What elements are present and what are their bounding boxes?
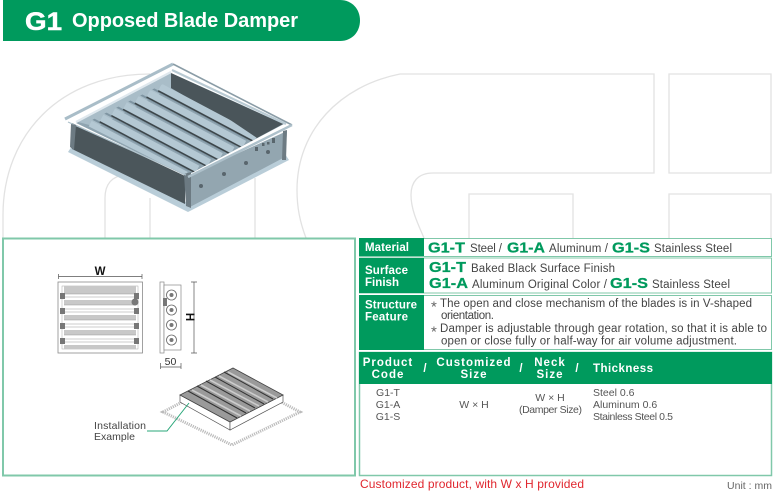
column: thickness (593, 387, 673, 423)
table header: Size (460, 369, 488, 381)
note: unit: Unit : mm (727, 480, 772, 492)
table header: Neck (534, 357, 566, 369)
column: neck size: W × H (535, 392, 565, 404)
row: material: G1-S (612, 240, 650, 256)
row: surface finish: Aluminum Original Color / (472, 279, 608, 291)
column: product codes: G1-A (376, 399, 400, 411)
table header: Size (536, 369, 564, 381)
column: thickness: Aluminum 0.6 (593, 399, 657, 411)
illustration: installation example (163, 368, 300, 445)
row: material: Material (365, 242, 409, 254)
blades (88, 87, 256, 179)
dimension: H (183, 282, 197, 353)
label: installation example: Installation (94, 420, 146, 432)
column: thickness: Steel 0.6 (593, 387, 635, 399)
table header: Customized (436, 357, 512, 369)
row: material: G1-T (428, 240, 465, 256)
product code G1: G1 (25, 8, 62, 36)
column: product codes: G1-S (376, 411, 400, 423)
note: customized product: Customized product, with W x H provided (360, 477, 584, 491)
table header: / (423, 363, 427, 375)
row: material: Steel / (470, 243, 503, 255)
row: surface finish: Stainless Steel (652, 279, 730, 291)
title text: Opposed Blade Damper (72, 10, 298, 32)
column: neck size: (Damper Size) (519, 404, 582, 416)
column: product codes (376, 387, 401, 423)
table header: Product (363, 357, 413, 369)
row: structure feature: The open and close mechanism of the blades is in V-shaped (440, 298, 752, 310)
table header: Code (372, 369, 404, 381)
title banner (3, 0, 360, 41)
row: structure feature: Feature (365, 312, 408, 324)
row: material: Stainless Steel (654, 243, 732, 255)
illustration: damper isometric (65, 64, 292, 212)
row: surface finish: G1-T (429, 259, 466, 276)
dimension: W: W (95, 266, 106, 278)
row: structure feature: * (431, 324, 437, 340)
row: surface finish: G1-S (610, 275, 648, 292)
column: neck size (519, 392, 582, 416)
column: product codes: G1-T (376, 387, 401, 399)
table header: Thickness (593, 363, 653, 375)
row: surface finish: Finish (365, 277, 399, 289)
table header (359, 352, 772, 384)
row: material: Aluminum / (549, 243, 609, 255)
row: surface finish: G1-A (429, 275, 468, 292)
column: customized size: W × H (459, 399, 489, 411)
row: structure feature: Damper is adjustable through gear rotation, so that it is able to (440, 323, 767, 335)
row: structure feature: open or close fully or half-way for air volume adjustment. (441, 336, 737, 348)
row: material (359, 238, 772, 256)
row: structure feature: * (431, 298, 437, 316)
table header: / (519, 363, 523, 375)
dimension: H: H (183, 313, 195, 321)
drawing: front view (58, 282, 142, 353)
label: installation example (94, 420, 146, 443)
row: surface finish (359, 258, 772, 293)
background logo outline (3, 74, 771, 238)
row: structure feature: orientation. (441, 310, 494, 322)
row: surface finish: Surface (365, 265, 408, 277)
table header: / (575, 363, 579, 375)
label: installation example: Example (94, 431, 135, 443)
panel: drawings (3, 238, 355, 476)
table: product specifications (359, 352, 772, 476)
leader line (147, 403, 189, 431)
column: thickness: Stainless Steel 0.5 (593, 411, 673, 423)
row: material: G1-A (507, 240, 545, 256)
row: structure feature: Structure (365, 300, 417, 312)
row: surface finish: Baked Black Surface Finish (471, 263, 615, 275)
dimension: 50 (160, 356, 181, 369)
row: structure feature (359, 295, 772, 350)
dimension: W (58, 266, 142, 279)
drawing: side view (160, 282, 181, 353)
dimension: 50: 50 (165, 356, 176, 368)
